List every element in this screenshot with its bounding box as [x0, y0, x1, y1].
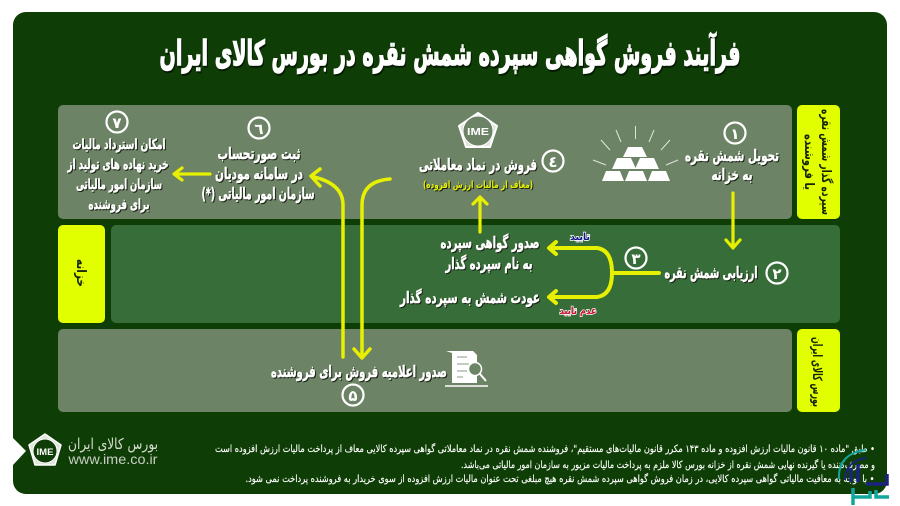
arrow: exchange up to step 6 [311, 169, 343, 357]
step 7: tax refund: خرید نهاده های تولید از [67, 157, 168, 173]
text: return bullion: عودت شمش به سپرده گذار [399, 288, 540, 308]
label: depositor or seller [797, 105, 840, 219]
step 4: sale [419, 150, 564, 191]
text: issue certificate [440, 233, 540, 274]
step 4: sale: فروش در نماد معاملاتی [419, 155, 537, 174]
label: approved: تایید [570, 232, 590, 243]
step 5: sale notice: صدور اعلامیه فروش برای فروشنده [271, 362, 447, 381]
step 2: assessment: ۲ [772, 265, 782, 283]
step 6: register invoice: سازمان امور مالیاتی (*) [202, 184, 314, 203]
step 7: tax refund: برای فروشنده [88, 197, 150, 213]
step 1: delivery: به خزانه [712, 165, 752, 184]
step 3: review [626, 248, 646, 268]
step 5: sale notice [271, 362, 447, 406]
text: issue certificate: به نام سپرده گذار [445, 254, 532, 274]
logo: Iran Mercantile Exchange [13, 434, 158, 467]
label: Iran commodity exchange: بورس کالای ایران [809, 337, 824, 407]
arrow: sale down to notice [354, 179, 390, 358]
step 6: register invoice: ثبت صورتحساب [218, 144, 300, 163]
arrow: certificate to sale [473, 197, 487, 232]
step 1: delivery: تحویل شمش نقره [685, 146, 779, 165]
label: depositor or seller: یا فروشنده [801, 134, 816, 190]
text: issue certificate: صدور گواهی سپرده [440, 233, 540, 253]
step 1: delivery: ۱ [730, 125, 740, 143]
icon: silver bars [593, 126, 678, 181]
step 3: review: ۳ [631, 250, 641, 268]
icon: invoice with magnifier [445, 351, 488, 386]
label: treasury: خزانه [73, 259, 88, 287]
label: treasury [58, 225, 105, 323]
logo: Iran Mercantile Exchange: www.ime.co.ir [67, 451, 158, 467]
label: not approved: عدم تایید [560, 306, 596, 317]
label: Iran commodity exchange [797, 329, 840, 412]
icon: IME logo [459, 113, 497, 147]
arrow: step 6 to step 7 [174, 168, 210, 180]
panel: exchange row [58, 329, 840, 412]
step 6: register invoice: ٦ [254, 120, 264, 138]
step 6: register invoice [202, 118, 314, 203]
step 2: assessment: ارزیابی شمش نقره [664, 263, 758, 282]
icon: IME logo: IME [467, 127, 489, 138]
text block: footnotes [215, 443, 875, 485]
logo: Iran Mercantile Exchange: IME [36, 447, 54, 457]
arrow: step 1 to step 2 [726, 193, 740, 248]
step 7: tax refund: امکان استرداد مالیات [72, 137, 166, 153]
step 6: register invoice: در سامانه مودیان [215, 164, 303, 183]
icon: watermark [839, 450, 889, 505]
panel: treasury row [58, 225, 840, 323]
text block: footnotes: • طبق "ماده ۱۰ قانون مالیات ارزش افزوده و ماده ۱۴۳ مکرر قانون مالیات‌های مستقیم"، فروشنده شمش نقره در نماد معاملاتی گواهی سپرده کالایی معاف از پرداخت مالیات ارزش افزوده است [215, 443, 875, 455]
panel: depositor row [58, 105, 840, 219]
step 7: tax refund: سازمان امور مالیاتی [76, 177, 162, 193]
logo: Iran Mercantile Exchange: بورس کالای ایران [68, 435, 158, 453]
step 7: tax refund: ۷ [112, 114, 122, 132]
step 4: sale: ٤ [548, 153, 558, 171]
step 7: tax refund [67, 112, 168, 213]
label: depositor or seller: سپرده گذار شمش نقره [818, 109, 834, 215]
step 4: sale: (معاف از مالیات ارزش افزوده) [423, 180, 533, 191]
step 5: sale notice: ۵ [348, 387, 358, 405]
step 1: delivery [685, 122, 779, 184]
arrow: step 3 decision fork [549, 242, 659, 303]
